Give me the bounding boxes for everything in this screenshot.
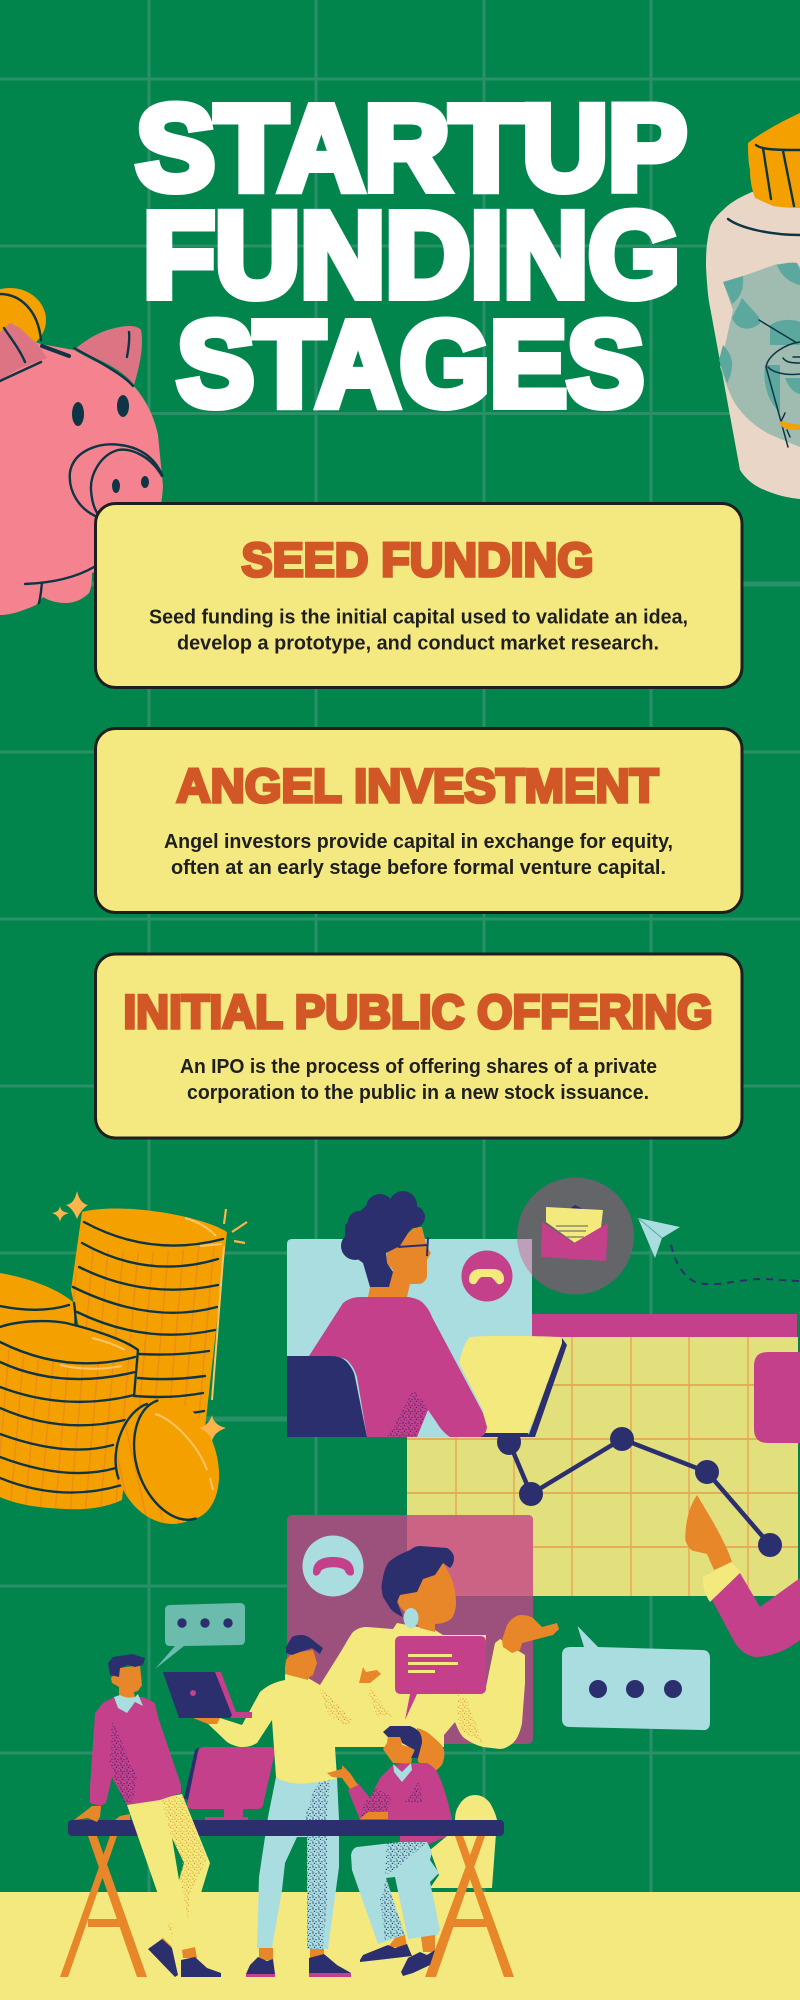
ear left: [0, 323, 47, 380]
head: [111, 1665, 142, 1698]
person: standing woman: [320, 1546, 559, 1749]
card: initial public offering: corporation to the public in a new stock issuance.: [187, 1082, 649, 1104]
lower body: [400, 1836, 447, 1845]
card: seed funding: SEED FUNDING: [242, 533, 594, 586]
trousers: [127, 1794, 210, 1950]
chart header bar: [532, 1314, 797, 1337]
illustration: coin stacks: [0, 1191, 247, 1537]
back stack: [71, 1209, 227, 1428]
person: seated woman: [327, 1726, 452, 1976]
illustration: monitor: [184, 1747, 275, 1820]
hands: [327, 1765, 388, 1819]
collar: [114, 1694, 143, 1713]
person: [309, 1191, 487, 1437]
trestle right: [425, 1836, 514, 1977]
panel: video call woman: [287, 1515, 533, 1744]
illustration: piggy bank: [0, 288, 163, 615]
laptop: [163, 1672, 252, 1718]
collar: [393, 1763, 412, 1782]
card: initial public offering: An IPO is the process of offering shares of a private: [180, 1056, 657, 1078]
desk top: [68, 1820, 504, 1836]
hand under laptop: [193, 1718, 220, 1724]
money inside jar: [719, 263, 800, 447]
laptop: [459, 1336, 567, 1437]
card: seed funding: Seed funding is the initial capital used to validate an idea,: [149, 606, 688, 628]
illustration: pointing hand: [685, 1495, 800, 1657]
card: initial public offering: INITIAL PUBLIC OFFERING: [124, 985, 712, 1038]
icon: paper plane: [638, 1218, 800, 1284]
speech bubble: light blue: [562, 1626, 710, 1730]
card: seed funding: [96, 504, 742, 688]
shoes: [259, 1948, 324, 1960]
snout: [70, 444, 162, 521]
speech bubble: [395, 1636, 486, 1720]
small hand: [359, 1667, 381, 1683]
ear right: [74, 326, 142, 385]
sweater upper: [348, 1763, 452, 1820]
card: angel investment: often at an early stage before formal venture capital.: [171, 857, 666, 879]
illustration: jar of money: [706, 113, 800, 499]
trestle left: [60, 1836, 147, 1977]
title: STARTUP: [136, 80, 687, 216]
hands: [74, 1806, 130, 1822]
call icon: [302, 1536, 364, 1596]
side tab: [754, 1352, 800, 1443]
sweater: [205, 1674, 382, 1784]
title: [136, 80, 687, 432]
person: man with laptop: [163, 1635, 382, 1977]
speech bubble: teal: [155, 1603, 245, 1669]
chair: [287, 1356, 367, 1437]
shoes: [388, 1935, 435, 1952]
desk: [60, 1820, 514, 1977]
raised hand: [502, 1615, 559, 1653]
card: angel investment: [96, 728, 742, 912]
shoes: [162, 1937, 197, 1958]
title: FUNDING: [143, 186, 680, 322]
sparkles: [52, 1191, 226, 1441]
panel: video call man: [287, 1191, 567, 1437]
trousers: [257, 1777, 339, 1949]
front stack: [0, 1321, 138, 1509]
card: angel investment: Angel investors provide capital in exchange for equity,: [164, 831, 673, 853]
floor: [0, 1892, 800, 2000]
fallen coin: [99, 1388, 234, 1537]
card: seed funding: develop a prototype, and conduct market research.: [177, 632, 659, 654]
line chart: [497, 1427, 782, 1557]
illustration: chair: [430, 1795, 497, 1888]
head: [285, 1650, 317, 1680]
chart panel: [407, 1314, 800, 1596]
illustration: envelope notification: [517, 1178, 634, 1294]
left stack: [0, 1273, 76, 1340]
gap between legs: [172, 1838, 184, 1880]
sweater: [90, 1697, 181, 1806]
call icon: [462, 1250, 512, 1302]
card: angel investment: ANGEL INVESTMENT: [176, 759, 659, 812]
card: initial public offering: [96, 954, 742, 1138]
person: standing man: [74, 1654, 221, 1977]
title: STAGES: [177, 296, 644, 432]
